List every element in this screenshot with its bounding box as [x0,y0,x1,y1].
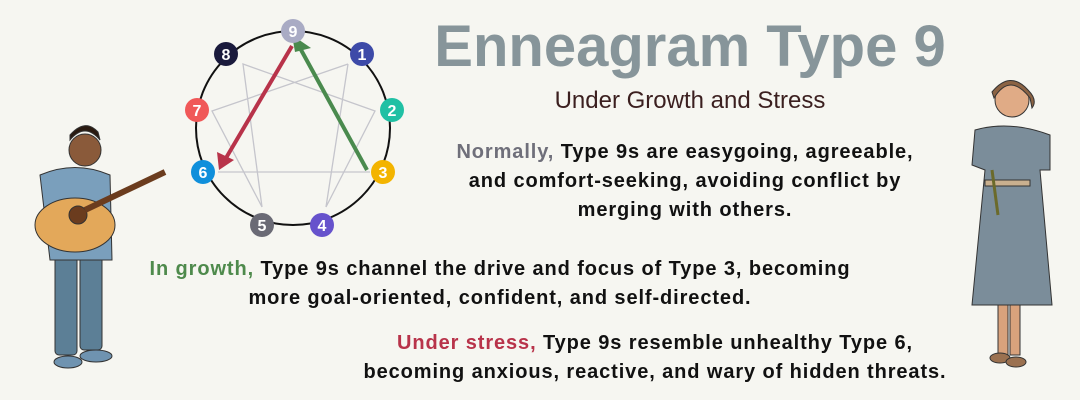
nodes: 7 [193,103,202,120]
text: normally: Normally, Type 9s are easygoing, agreeable, [456,141,914,163]
illustration: man with guitar [35,126,165,368]
text: growth: In growth, Type 9s channel the drive and focus of Type 3, becoming [150,258,850,280]
nodes: 2 [388,103,397,120]
nodes: 8 [222,47,231,64]
text: stress: Under stress, Type 9s resemble unhealthy Type 6, [397,332,913,354]
text: normally [456,141,914,221]
text: stress: becoming anxious, reactive, and wary of hidden threats. [364,361,946,383]
nodes [185,19,404,237]
arrow: growth 3 to 9 [292,35,367,170]
text: growth: more goal-oriented, confident, and self-directed. [248,287,752,309]
arrow: stress 9 to 6 [217,46,292,170]
nodes: 9 [289,24,298,41]
text: growth [150,258,850,309]
nodes: 3 [379,165,388,182]
text: stress [364,332,946,383]
nodes: 5 [258,218,267,235]
text: normally: and comfort-seeking, avoiding conflict by [469,170,901,192]
nodes: 4 [318,218,327,235]
title: Enneagram Type 9 [434,14,946,79]
nodes: 6 [199,165,208,182]
nodes: 1 [358,47,367,64]
illustration: woman with flowers [972,80,1052,367]
text: normally: merging with others. [578,199,792,221]
subtitle: Under Growth and Stress [555,87,825,114]
